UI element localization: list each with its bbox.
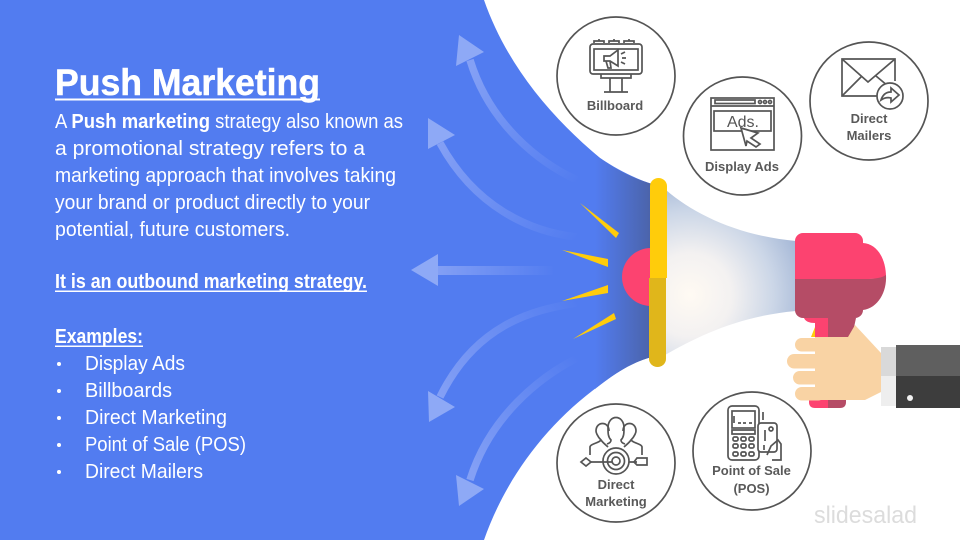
badge: direct mailers: Direct	[851, 111, 888, 126]
badge: point of sale	[693, 392, 811, 510]
hand	[787, 325, 881, 400]
megaphone body	[795, 233, 863, 318]
intro paragraph: potential, future customers.	[55, 219, 290, 241]
intro paragraph: A Push marketing strategy also known as	[55, 111, 403, 133]
icon: audience target	[581, 418, 647, 474]
icon: browser ad	[711, 98, 774, 150]
badge: point of sale: Point of Sale	[712, 463, 791, 478]
arrow: down left 1	[428, 303, 577, 422]
blue shading behind megaphone	[595, 154, 652, 389]
badge: display ads: Ads.	[727, 114, 759, 131]
megaphone handle	[804, 318, 856, 408]
intro paragraph: your brand or product directly to your	[55, 192, 370, 214]
arrow: up left 2	[428, 118, 577, 237]
badge: billboard: Billboard	[587, 98, 643, 113]
examples list	[55, 326, 246, 483]
title: Push Marketing	[55, 62, 320, 103]
examples list: Display Ads	[85, 353, 185, 375]
badge: point of sale: (POS)	[733, 481, 770, 496]
icon: cursor	[741, 128, 760, 147]
icon: envelope with forward arrow	[842, 59, 903, 109]
icon: billboard	[590, 39, 642, 92]
arrow: up left 1	[456, 35, 577, 180]
badge: display ads	[684, 77, 802, 195]
badge: direct mailers	[810, 42, 928, 160]
badge: billboard	[557, 17, 675, 135]
megaphone trigger	[811, 327, 815, 337]
intro paragraph	[55, 111, 403, 241]
logo: slidesalad: slidesalad	[814, 502, 917, 529]
megaphone back cap	[863, 243, 886, 310]
arrow: down left 2	[456, 358, 577, 506]
badge: direct mailers: Mailers	[847, 128, 891, 143]
badge: direct marketing: Direct	[598, 477, 635, 492]
intro paragraph: marketing approach that involves taking	[55, 165, 396, 187]
examples list: Billboards	[85, 380, 172, 402]
examples list: Direct Marketing	[85, 407, 227, 429]
arrow: left	[411, 254, 556, 286]
intro paragraph: a promotional strategy refers to a	[55, 138, 366, 160]
examples list: Point of Sale (POS)	[85, 434, 246, 456]
sound spikes	[562, 203, 619, 339]
megaphone	[622, 178, 886, 408]
megaphone front dome	[622, 248, 651, 306]
blue background panel	[0, 0, 652, 540]
megaphone cone	[665, 190, 796, 355]
badge: direct marketing	[557, 404, 675, 522]
icon: card terminal	[728, 406, 781, 460]
outbound statement: It is an outbound marketing strategy.	[55, 271, 367, 293]
examples list: Direct Mailers	[85, 461, 203, 483]
badge: display ads: Display Ads	[705, 159, 779, 174]
examples list: Examples:	[55, 326, 143, 348]
jacket sleeve	[896, 345, 960, 408]
megaphone rim	[649, 178, 667, 367]
shirt cuff	[881, 347, 896, 406]
badge: direct marketing: Marketing	[585, 494, 647, 509]
